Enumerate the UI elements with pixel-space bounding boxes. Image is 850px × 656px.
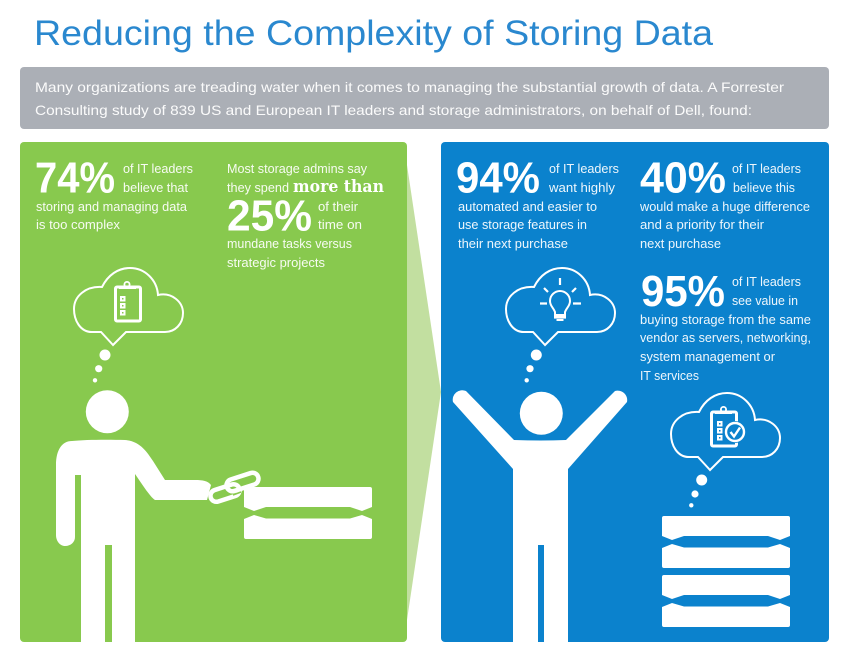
person chained to storage (56, 390, 211, 642)
person with raised arms (453, 390, 627, 642)
stat: 74%: of IT leaders (123, 162, 193, 176)
icon: thought cloud with light bulb (506, 268, 615, 382)
title: Reducing the Complexity of Storing Data (34, 14, 714, 53)
stat: 95%: see value in (732, 294, 798, 308)
stat: 40%: next purchase (640, 237, 721, 251)
stat: 25%: strategic projects (227, 256, 325, 270)
stat: 94%: use storage features in (458, 218, 587, 232)
stat: 94%: their next purchase (458, 237, 568, 251)
panel: complex storage (20, 142, 407, 642)
stat: 40%: 40% (640, 154, 726, 202)
stat: 40% (639, 154, 810, 251)
intro banner: Consulting study of 839 US and European IT leaders and storage administrators, on behalf of Dell, found: (35, 102, 752, 118)
stat: 95%: 95% (641, 267, 725, 316)
stat: 95%: IT services (640, 369, 699, 383)
stat: 95%: buying storage from the same (640, 313, 811, 327)
stat: 25%: time on (318, 218, 362, 232)
storage drives split apart (244, 487, 372, 539)
icon: chain links (209, 471, 260, 503)
panel: simplified storage (441, 142, 829, 642)
intro banner (20, 67, 829, 129)
intro banner: Many organizations are treading water when it comes to managing the substantial growth of data. A Forrester (35, 79, 784, 95)
stat: 25%: of their (318, 200, 358, 214)
stat: 95%: system management or (640, 350, 775, 364)
stat: 40%: would make a huge difference (639, 200, 810, 214)
stat: 25%: they spend (227, 181, 289, 195)
stat: 25%: more than (293, 177, 384, 197)
stat: 94%: 94% (456, 154, 540, 202)
stat: 94% (456, 154, 619, 251)
stat: 74% (35, 154, 193, 232)
storage drives stack (662, 516, 790, 627)
stat: 74%: believe that (123, 181, 189, 195)
stat: 74%: storing and managing data (36, 200, 187, 214)
stat: 40%: and a priority for their (640, 218, 764, 232)
stat: 95%: of IT leaders (732, 275, 801, 289)
stat: 95% (640, 267, 811, 383)
icon: thought cloud with checklist (671, 393, 780, 507)
stat: 40%: believe this (733, 181, 795, 195)
icon: thought cloud with clipboard (74, 268, 183, 382)
stat: 94%: want highly (548, 181, 616, 195)
stat: 25% (227, 162, 384, 270)
stat: 94%: of IT leaders (549, 162, 619, 176)
stat: 94%: automated and easier to (458, 200, 597, 214)
arrow between panels (407, 165, 441, 620)
stat: 74%: 74% (35, 154, 115, 202)
stat: 25%: Most storage admins say (227, 162, 368, 176)
stat: 95%: vendor as servers, networking, (640, 331, 811, 345)
stat: 40%: of IT leaders (732, 162, 801, 176)
stat: 25%: 25% (227, 192, 312, 240)
stat: 74%: is too complex (36, 218, 121, 232)
stat: 25%: mundane tasks versus (227, 237, 352, 251)
